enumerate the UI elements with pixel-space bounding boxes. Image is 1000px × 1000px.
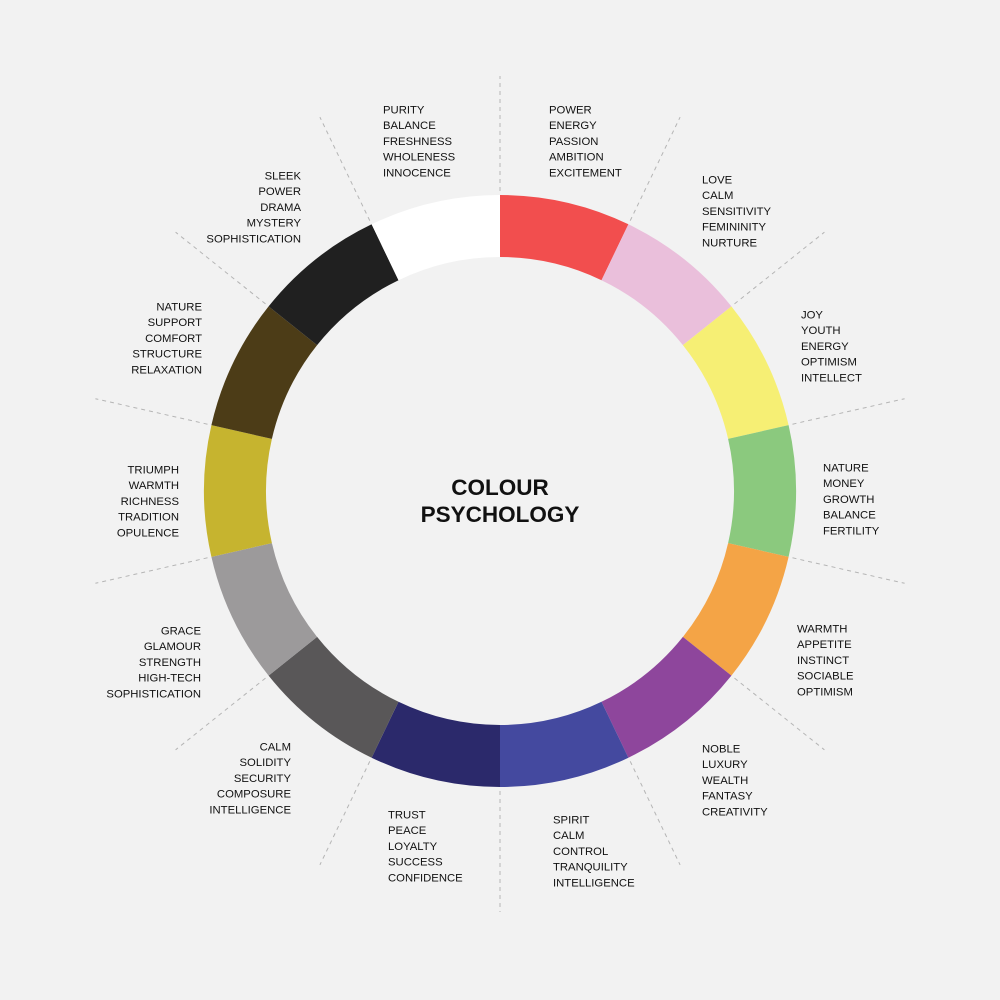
- label: white: INNOCENCE: [383, 167, 451, 179]
- label: orange: INSTINCT: [797, 655, 849, 667]
- label: blue: INTELLIGENCE: [553, 877, 635, 889]
- label: grey: GLAMOUR: [144, 641, 201, 653]
- label: black: SLEEK: [265, 170, 301, 182]
- label: pink: SENSITIVITY: [702, 206, 772, 218]
- label: gold: TRIUMPH: [128, 464, 179, 476]
- label: red: PASSION: [549, 136, 598, 148]
- label: brown: STRUCTURE: [132, 349, 202, 361]
- label: brown: SUPPORT: [148, 317, 202, 329]
- label: yellow: OPTIMISM: [801, 357, 857, 369]
- label: blue: TRANQUILITY: [553, 862, 628, 874]
- label: dark grey: INTELLIGENCE: [209, 804, 291, 816]
- label: white: FRESHNESS: [383, 136, 453, 148]
- label: orange: OPTIMISM: [797, 686, 853, 698]
- label: brown: NATURE: [156, 302, 202, 314]
- label: grey: GRACE: [161, 626, 201, 638]
- label: brown: COMFORT: [145, 333, 202, 345]
- label: red: EXCITEMENT: [549, 167, 622, 179]
- donut chart: [204, 195, 796, 787]
- label: green: GROWTH: [823, 494, 874, 506]
- label: grey: STRENGTH: [139, 657, 201, 669]
- label: gold: TRADITION: [118, 512, 179, 524]
- label: red: ENERGY: [549, 120, 597, 132]
- label: blue: CONTROL: [553, 846, 608, 858]
- label: dark grey: COMPOSURE: [217, 789, 291, 801]
- label: orange: SOCIABLE: [797, 671, 854, 683]
- title: PSYCHOLOGY: [421, 502, 579, 527]
- label: red: AMBITION: [549, 152, 604, 164]
- label: orange: APPETITE: [797, 639, 852, 651]
- label: purple: NOBLE: [702, 744, 741, 756]
- label: navy: CONFIDENCE: [388, 872, 463, 884]
- label: dark grey: CALM: [260, 742, 291, 754]
- label: orange: WARMTH: [797, 624, 847, 636]
- label: blue: SPIRIT: [553, 814, 590, 826]
- label: yellow: INTELLECT: [801, 372, 862, 384]
- label: purple: FANTASY: [702, 791, 753, 803]
- label: green: MONEY: [823, 478, 865, 490]
- label: black: POWER: [258, 186, 301, 198]
- label: black: MYSTERY: [247, 218, 301, 230]
- label: yellow: ENERGY: [801, 341, 849, 353]
- label: pink: NURTURE: [702, 237, 757, 249]
- label: navy: SUCCESS: [388, 857, 443, 869]
- label: dark grey: SECURITY: [234, 773, 291, 785]
- label: white: BALANCE: [383, 120, 436, 132]
- label: black: DRAMA: [260, 202, 301, 214]
- label: purple: CREATIVITY: [702, 806, 768, 818]
- label: gold: OPULENCE: [117, 527, 179, 539]
- label: white: PURITY: [383, 104, 425, 116]
- label: purple: LUXURY: [702, 759, 748, 771]
- label: pink: CALM: [702, 190, 733, 202]
- label: navy: LOYALTY: [388, 841, 438, 853]
- label: green: BALANCE: [823, 510, 876, 522]
- label: grey: HIGH-TECH: [138, 673, 201, 685]
- label: blue: CALM: [553, 830, 584, 842]
- label: dark grey: SOLIDITY: [240, 757, 291, 769]
- label: grey: SOPHISTICATION: [106, 688, 201, 700]
- label: black: SOPHISTICATION: [206, 233, 301, 245]
- label: pink: FEMININITY: [702, 222, 766, 234]
- label: brown: RELAXATION: [131, 364, 202, 376]
- label: gold: RICHNESS: [121, 496, 179, 508]
- label: green: FERTILITY: [823, 525, 880, 537]
- label: yellow: JOY: [801, 310, 823, 322]
- label: navy: TRUST: [388, 810, 426, 822]
- label: yellow: YOUTH: [801, 325, 841, 337]
- label: green: NATURE: [823, 462, 869, 474]
- label: purple: WEALTH: [702, 775, 748, 787]
- label: pink: LOVE: [702, 174, 733, 186]
- title: [421, 475, 579, 527]
- title: COLOUR: [451, 475, 549, 500]
- label: gold: WARMTH: [129, 480, 179, 492]
- label: navy: PEACE: [388, 825, 427, 837]
- label: white: WHOLENESS: [383, 152, 456, 164]
- label: red: POWER: [549, 104, 592, 116]
